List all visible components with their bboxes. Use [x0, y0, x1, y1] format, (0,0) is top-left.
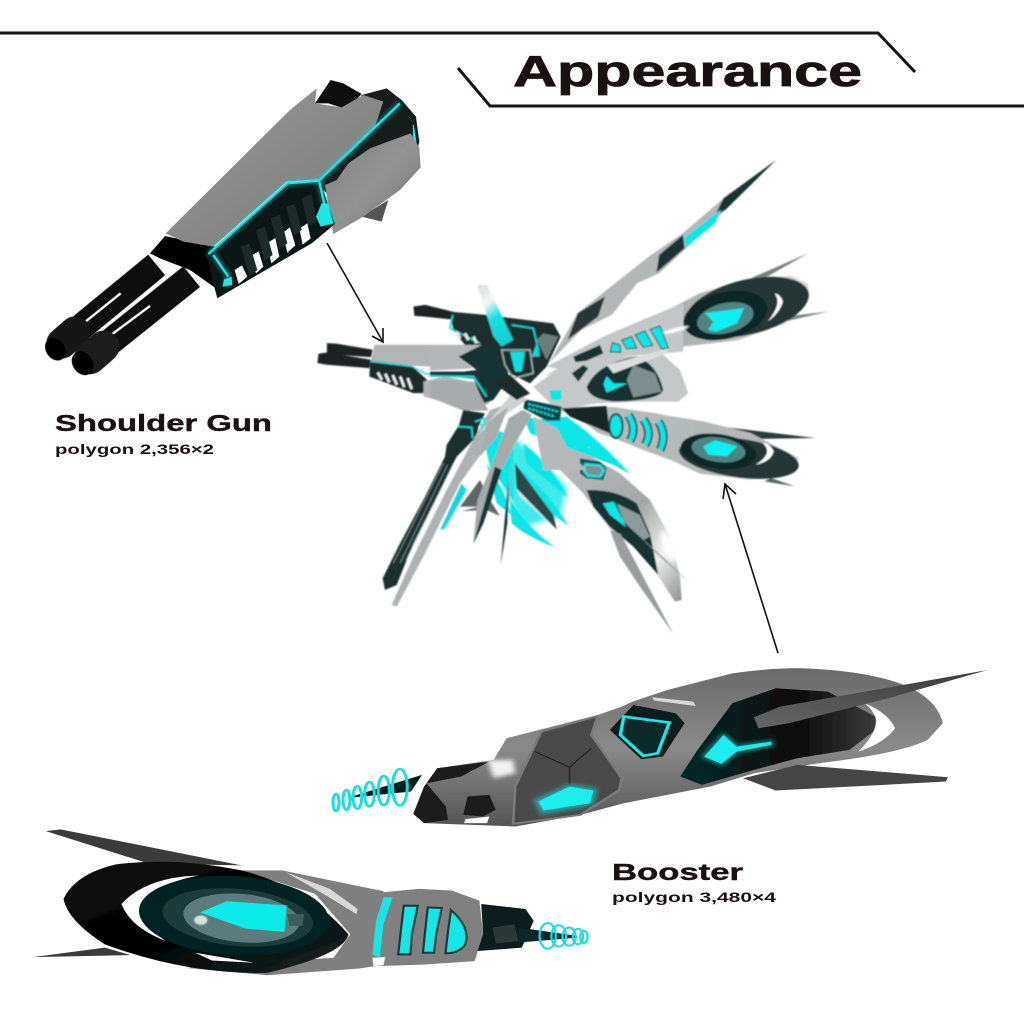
lower half of figure — [383, 403, 691, 634]
cyan rings — [540, 923, 588, 949]
dark vent fins — [241, 194, 317, 276]
arrow: booster detail to figure — [723, 484, 778, 653]
white crescent — [858, 703, 895, 752]
label: booster — [612, 859, 777, 905]
exhaust cavity — [680, 688, 876, 785]
title: Appearance — [513, 47, 862, 96]
booster detail render: side view — [333, 668, 987, 826]
header rule: bottom — [458, 68, 1024, 106]
white vents — [235, 223, 311, 284]
lower spikes — [610, 530, 673, 634]
lower booster body — [537, 420, 682, 602]
gatling arm — [383, 410, 480, 590]
lower booster root and flame — [523, 415, 627, 470]
hex panel — [580, 458, 607, 480]
grey shell — [186, 870, 385, 975]
label: shoulder gun — [55, 410, 272, 457]
dark fins — [460, 463, 557, 529]
tail and needle — [478, 904, 577, 951]
rear gun barrel — [413, 305, 456, 320]
rear black cap — [317, 88, 419, 203]
black collar — [150, 236, 218, 290]
notch — [315, 80, 362, 109]
central full figure — [317, 160, 829, 634]
label: booster: Booster — [612, 859, 743, 885]
booster dark intake — [587, 490, 658, 575]
gatling barrel lines — [393, 463, 453, 563]
big dark bowl — [64, 862, 348, 973]
crest blade — [477, 285, 513, 347]
cyan machinery — [523, 399, 562, 421]
upper spike — [754, 670, 987, 728]
cyan core — [704, 735, 771, 764]
lower rear plate — [325, 133, 421, 234]
white crescent — [121, 875, 199, 941]
booster detail render: front view — [33, 829, 588, 975]
nozzle dark panels — [413, 760, 515, 823]
rear cage — [372, 889, 483, 966]
cyan glow lines — [208, 103, 416, 287]
main grey body — [166, 88, 383, 247]
shoulder gun detail render — [41, 80, 421, 379]
blade cyan streak — [440, 483, 467, 530]
top pentagon vent — [610, 697, 696, 759]
hex armour panel — [513, 716, 622, 824]
cyan flames — [480, 417, 630, 547]
bowl interior — [136, 870, 332, 961]
lower right booster shell — [564, 406, 815, 486]
middle booster — [533, 355, 688, 410]
arrow: gun detail to figure — [327, 243, 383, 342]
label: shoulder gun: Shoulder Gun — [55, 410, 272, 436]
silver hub blades — [474, 386, 527, 437]
lower right booster disc — [676, 429, 801, 485]
header rule: top — [0, 33, 915, 72]
sheen — [658, 529, 679, 564]
front gun shoulder dark — [430, 345, 510, 403]
rear foot — [362, 200, 388, 222]
rings and needle — [333, 769, 422, 811]
spikes — [33, 829, 241, 957]
lower white sliver — [195, 953, 254, 963]
head cyan — [510, 352, 525, 372]
dark trench — [207, 181, 335, 298]
upper right booster shell — [544, 253, 829, 376]
upper wing blade — [549, 160, 776, 363]
label: shoulder gun: polygon 2,356×2 — [55, 442, 214, 457]
central hub and inner booster roots — [430, 285, 693, 470]
upper right booster disc — [662, 266, 815, 349]
lower right booster root — [560, 407, 693, 468]
lower left shoulder — [442, 410, 485, 470]
shell — [413, 668, 943, 826]
long outer blade — [392, 403, 510, 607]
gun grey plates — [430, 345, 482, 371]
top booster root — [547, 303, 683, 370]
label: booster: polygon 3,480×4 — [612, 890, 777, 905]
centre blades — [473, 410, 522, 544]
rear shoulder gun — [450, 312, 561, 383]
flame glow — [503, 437, 567, 527]
white sliver — [286, 872, 358, 914]
front shoulder gun barrels and nose — [317, 343, 490, 409]
barrels — [41, 265, 192, 379]
lower spike — [743, 765, 948, 791]
